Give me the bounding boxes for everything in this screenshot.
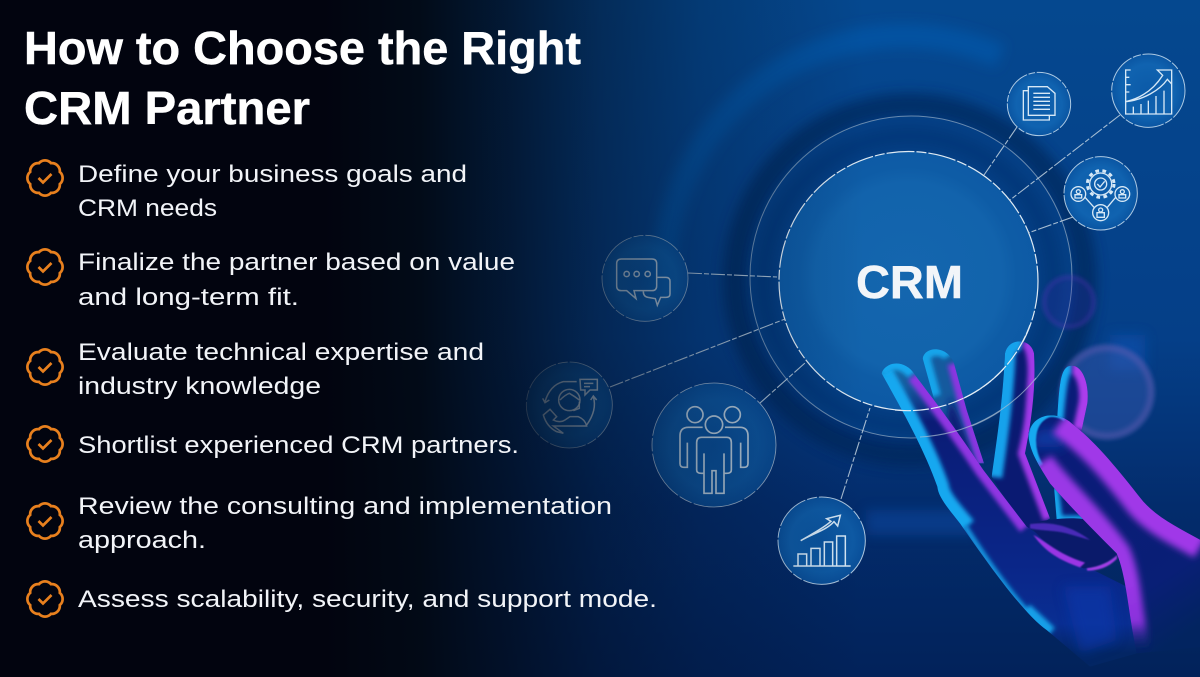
item 1: CRM needs <box>78 195 217 222</box>
second finger <box>922 349 984 464</box>
central CRM hub <box>750 116 1072 438</box>
icon: team process gear <box>1064 157 1137 230</box>
item 5: approach. <box>78 527 206 554</box>
icon: documents <box>1007 72 1071 136</box>
ring finger <box>1054 366 1088 520</box>
thumb and wrist <box>1023 407 1200 660</box>
middle finger <box>992 342 1050 530</box>
icon: team of people <box>652 383 776 507</box>
CRM label: CRM <box>856 256 963 308</box>
icon: chat bubbles <box>602 235 688 321</box>
title: CRM Partner <box>24 82 310 134</box>
item 2: and long-term fit. <box>78 284 299 311</box>
item 6: Assess scalability, security, and support mode. <box>78 586 657 613</box>
hub arcs over fingers <box>895 325 1036 437</box>
title: How to Choose the Right <box>24 22 581 74</box>
item 4: Shortlist experienced CRM partners. <box>78 432 519 459</box>
item 2: Finalize the partner based on value <box>78 249 515 276</box>
palm hollow <box>1028 518 1117 571</box>
item 1 <box>27 160 467 222</box>
title <box>24 22 581 134</box>
item 5: Review the consulting and implementation <box>78 493 612 520</box>
item 3: Evaluate technical expertise and <box>78 339 484 366</box>
icon: rising bar chart <box>778 497 865 584</box>
decorative bubbles <box>1044 277 1154 439</box>
item 5 <box>27 493 612 554</box>
item 2 <box>27 249 515 311</box>
item 3: industry knowledge <box>78 373 321 400</box>
item 3 <box>27 339 484 400</box>
icon: customer support agent <box>526 362 612 448</box>
palm and little finger <box>877 357 1143 670</box>
item 1: Define your business goals and <box>78 161 467 188</box>
illustration: hand <box>877 337 1200 670</box>
checklist <box>27 160 657 617</box>
icon: growth chart with ruler <box>1112 54 1185 127</box>
item 4 <box>27 426 519 462</box>
item 6 <box>27 581 657 617</box>
connector lines <box>610 115 1120 499</box>
